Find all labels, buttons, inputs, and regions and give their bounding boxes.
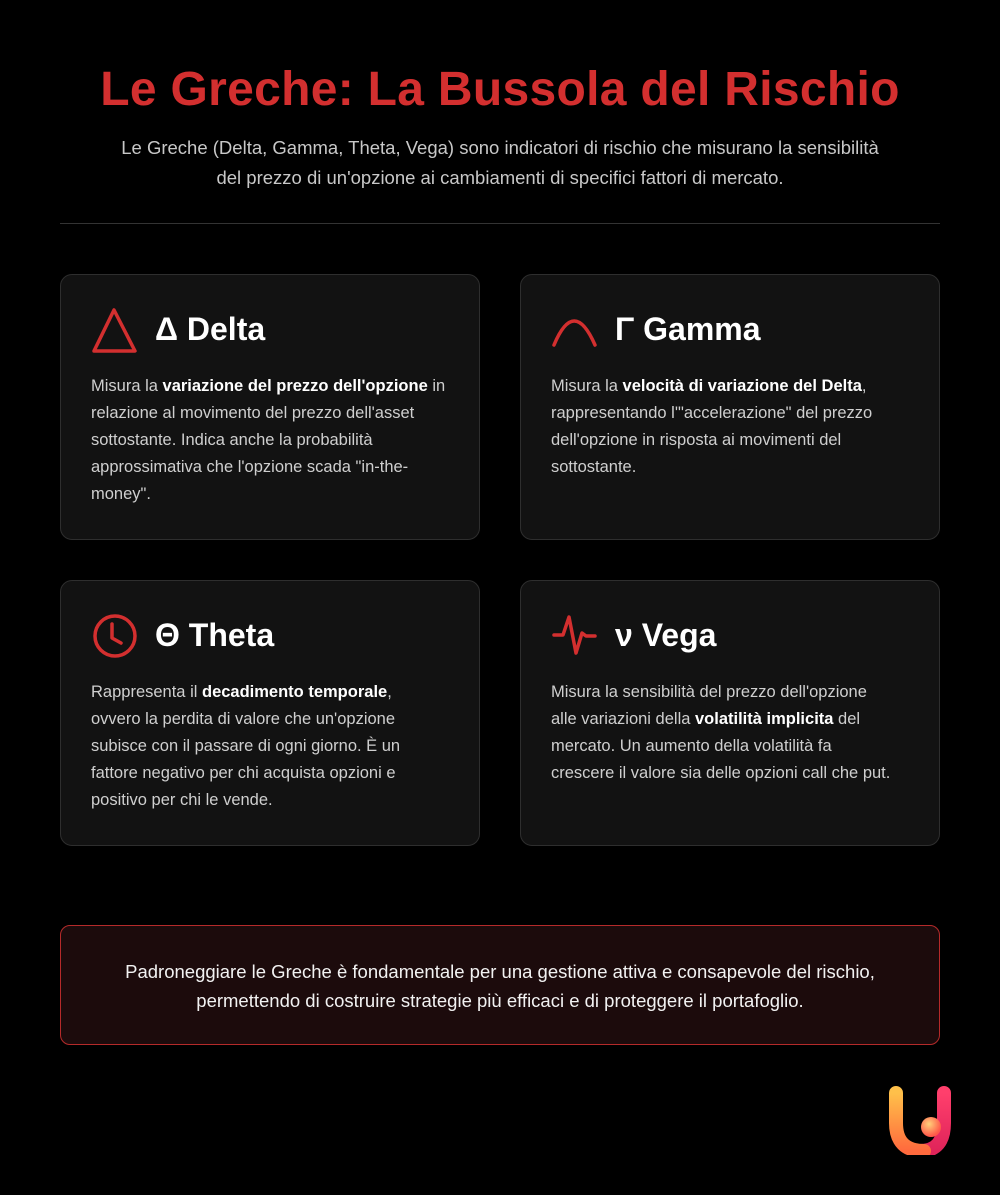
panel: theta [60, 580, 480, 846]
text: gamma: dell'opzione in risposta ai movimenti del [551, 431, 841, 449]
text: delta: sottostante. Indica anche la probabilità [91, 431, 373, 449]
icon: triangle [92, 308, 137, 353]
text: vega: crescere il valore sia delle opzioni call che put. [551, 764, 890, 782]
icon: clock [93, 614, 137, 658]
heading: vega: ν Vega [615, 617, 716, 653]
callout: permettendo di costruire strategie più efficaci e di proteggere il portafoglio. [196, 990, 804, 1011]
text: gamma: Misura la velocità di variazione del Delta, [551, 377, 866, 395]
icon: curve [552, 319, 597, 347]
text: delta: relazione al movimento del prezzo dell'asset [91, 404, 414, 422]
title: Le Greche: La Bussola del Rischio [100, 63, 900, 116]
heading: delta: Δ Delta [155, 311, 265, 347]
logo [889, 1086, 951, 1155]
icon: pulse [552, 615, 597, 655]
subtitle: del prezzo di un'opzione ai cambiamenti di specifici fattori di mercato. [216, 167, 784, 188]
text: vega: Misura la sensibilità del prezzo dell'opzione [551, 683, 867, 701]
text: theta: subisce con il passare di ogni giorno. È un [91, 737, 400, 755]
panel: gamma [520, 274, 940, 540]
text: theta [91, 683, 400, 809]
text: vega: mercato. Un aumento della volatilità fa [551, 737, 832, 755]
text: delta: money". [91, 485, 151, 503]
text: vega [551, 683, 890, 782]
heading: gamma: Γ Gamma [615, 311, 761, 347]
panel: delta [60, 274, 480, 540]
subtitle: Le Greche (Delta, Gamma, Theta, Vega) sono indicatori di rischio che misurano la sensibilità [121, 137, 879, 158]
text: theta: positivo per chi le vende. [91, 791, 273, 809]
callout: Padroneggiare le Greche è fondamentale per una gestione attiva e consapevole del rischio, [125, 961, 875, 982]
heading: theta: Θ Theta [155, 617, 274, 653]
text: theta: fattore negativo per chi acquista opzioni e [91, 764, 396, 782]
text: delta: approssimativa che l'opzione scada "in-the- [91, 458, 408, 476]
panel: vega [520, 580, 940, 846]
text: theta: Rappresenta il decadimento temporale, [91, 683, 392, 701]
text: delta: Misura la variazione del prezzo dell'opzione in [91, 377, 445, 395]
text: gamma: rappresentando l'"accelerazione" del prezzo [551, 404, 872, 422]
callout [60, 925, 940, 1045]
text: theta: ovvero la perdita di valore che un'opzione [91, 710, 395, 728]
text: gamma [551, 377, 872, 476]
text: gamma: sottostante. [551, 458, 636, 476]
text: vega: alle variazioni della volatilità implicita del [551, 710, 860, 728]
subtitle [121, 137, 879, 188]
text: delta [91, 377, 445, 503]
